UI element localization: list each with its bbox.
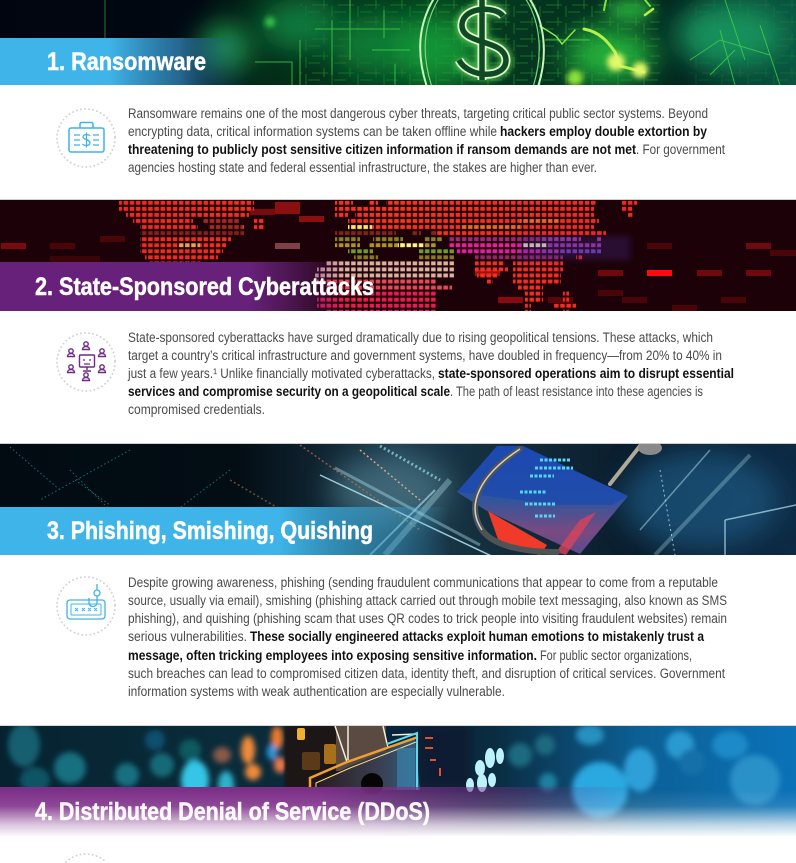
icon: network of people around a screen bbox=[57, 333, 115, 391]
text block: phishing), and quishing (phishing scam that uses QR codes to trick people into visiting fraudulent websites) remain bbox=[128, 611, 727, 626]
text block: such breaches can lead to compromised citizen data, identity theft, and disruption of critical services. Government bbox=[128, 666, 725, 681]
icon: hook over password field bbox=[57, 577, 115, 635]
panel: 2. State-Sponsored Cyberattacks bbox=[0, 200, 796, 417]
white fade bbox=[0, 790, 796, 836]
text block: message, often tricking employees into exposing sensitive information. bbox=[128, 648, 537, 663]
icon: cropped dotted circle bbox=[66, 854, 106, 862]
banner image: fish hook and envelope on circuit board bbox=[0, 441, 796, 560]
heading: 3. Phishing, Smishing, Quishing bbox=[47, 517, 373, 545]
panel: 3. Phishing, Smishing, Quishing bbox=[0, 441, 796, 699]
panel: 4. Distributed Denial of Service (DDoS) bbox=[0, 723, 796, 862]
banner image: glowing padlock with bokeh bbox=[0, 723, 796, 836]
text block: For public sector organizations, bbox=[540, 648, 692, 663]
text block bbox=[127, 330, 734, 417]
text block: Ransomware remains one of the most dangerous cyber threats, targeting critical public sector systems. Beyond bbox=[128, 106, 708, 121]
title band bbox=[0, 507, 450, 555]
text block: hackers employ double extortion by bbox=[500, 124, 707, 139]
text block: target a country’s critical infrastructure and government systems, have doubled in frequency—from 20% to 40% in bbox=[128, 348, 722, 363]
heading: 4. Distributed Denial of Service (DDoS) bbox=[35, 798, 430, 826]
title band bbox=[0, 787, 640, 836]
divider bbox=[0, 443, 796, 444]
title band bbox=[0, 262, 345, 311]
text block bbox=[128, 575, 727, 699]
heading: 1. Ransomware bbox=[47, 48, 206, 76]
text block: . For government bbox=[636, 142, 725, 157]
banner image: neon green dollar sign bbox=[0, 0, 796, 90]
text block: compromised credentials. bbox=[128, 402, 265, 417]
heading: 2. State-Sponsored Cyberattacks bbox=[35, 273, 374, 301]
title band bbox=[0, 38, 250, 85]
dollar sign bbox=[459, 0, 506, 80]
hook bbox=[610, 446, 640, 484]
text block: just a few years.¹ Unlike financially motivated cyberattacks, bbox=[127, 366, 435, 381]
divider bbox=[0, 199, 796, 200]
text block: . The path of least resistance into these agencies is bbox=[450, 384, 703, 399]
egg outline bbox=[420, 0, 544, 90]
text block: threatening to publicly post sensitive citizen information if ransom demands are not met bbox=[128, 142, 636, 157]
text block: Despite growing awareness, phishing (sending fraudulent communications that appear to come from a reputable bbox=[128, 575, 718, 590]
text block: These socially engineered attacks exploit human emotions to mistakenly trust a bbox=[250, 629, 704, 644]
text block: information systems with weak authentication are especially vulnerable. bbox=[128, 684, 505, 699]
divider bbox=[0, 725, 796, 726]
text block: agencies hosting state and federal essential infrastructure, the stakes are higher than ever. bbox=[128, 160, 597, 175]
text block: state-sponsored operations aim to disrupt essential bbox=[438, 366, 734, 381]
text block: services and compromise security on a geopolitical scale bbox=[128, 384, 450, 399]
icon: briefcase with dollar sign bbox=[57, 109, 115, 167]
banner image: pixel world map bbox=[0, 200, 796, 311]
panel: 1. Ransomware bbox=[0, 0, 796, 175]
envelope bbox=[457, 446, 628, 554]
text block: serious vulnerabilities. bbox=[128, 629, 247, 644]
text block: State-sponsored cyberattacks have surged dramatically due to rising geopolitical tensions. These attacks, which bbox=[128, 330, 713, 345]
text block bbox=[128, 106, 725, 175]
text block: encrypting data, critical information systems can be taken offline while bbox=[128, 124, 497, 139]
